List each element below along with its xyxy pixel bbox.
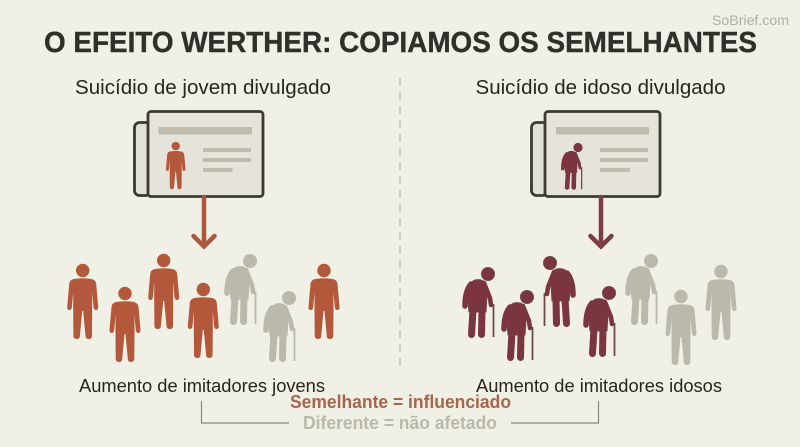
text: similar influenced: Semelhante = influenciado [290, 392, 511, 412]
icon: newspaper old [532, 112, 660, 196]
text: different unaffected: Diferente = não afetado [303, 413, 497, 433]
label: old imitators: Aumento de imitadores idosos [476, 376, 722, 396]
panel: young [67, 77, 339, 396]
center divider [399, 78, 401, 370]
icon: young person in newspaper [166, 142, 185, 189]
watermark: SoBrief.com [712, 12, 789, 28]
crowd: young [67, 254, 339, 362]
arrow: young [194, 197, 214, 246]
icon: old person in newspaper [563, 143, 582, 189]
title: O EFEITO WERTHER: COPIAMOS OS SEMELHANTES [44, 27, 757, 59]
icon: newspaper young [134, 112, 263, 196]
bracket [202, 401, 598, 423]
crowd: old [465, 254, 736, 365]
arrow: old [590, 197, 612, 246]
heading: young: Suicídio de jovem divulgado [75, 77, 331, 99]
label: young imitators: Aumento de imitadores jovens [79, 376, 325, 396]
panel: old [465, 77, 736, 396]
heading: old: Suicídio de idoso divulgado [476, 77, 726, 99]
